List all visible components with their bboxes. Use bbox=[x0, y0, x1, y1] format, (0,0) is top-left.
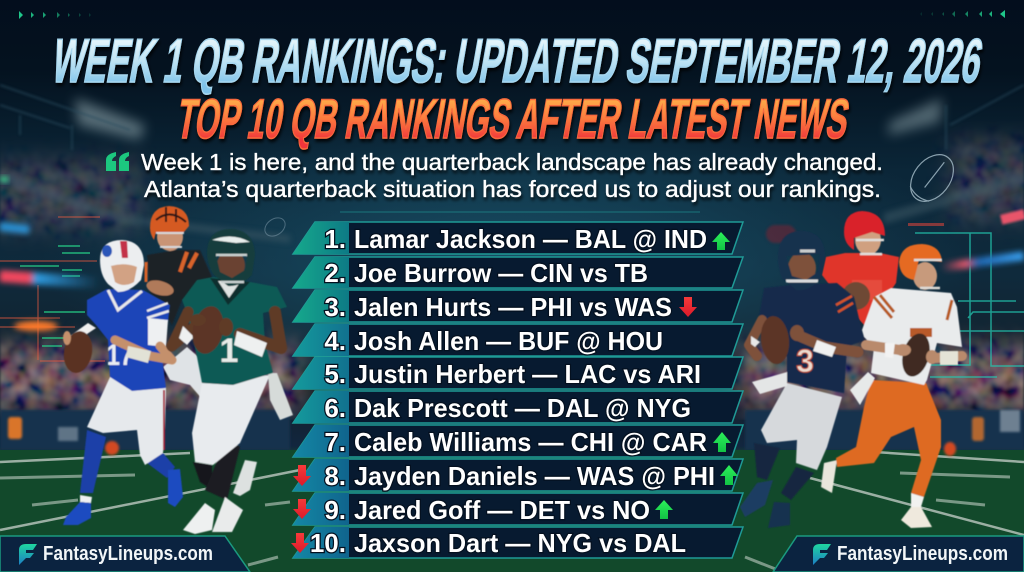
row 4: Josh Allen: Josh Allen — BUF @ HOU bbox=[354, 326, 663, 356]
row 2: Joe Burrow: Joe Burrow — CIN vs TB bbox=[354, 258, 648, 288]
intro text bbox=[141, 149, 883, 202]
row 9: Jared Goff: 9. bbox=[324, 495, 346, 525]
row 1: Lamar Jackson: Lamar Jackson — BAL @ IND bbox=[354, 224, 707, 254]
player: Caleb Williams (Bears): 3 bbox=[796, 343, 814, 379]
row 10: Jaxson Dart: Jaxson Dart — NYG vs DAL bbox=[354, 528, 686, 558]
rankings list bbox=[291, 222, 743, 558]
player: Patrick Mahomes (Chiefs, back right) bbox=[822, 211, 899, 327]
floating football outline right bbox=[902, 146, 962, 210]
row 3: Jalen Hurts: 3. bbox=[324, 292, 346, 322]
row 6: Dak Prescott: Dak Prescott — DAL @ NYG bbox=[354, 393, 691, 423]
decorative arrows: top left bbox=[19, 11, 91, 19]
row 5: Justin Herbert: Justin Herbert — LAC vs ARI bbox=[354, 359, 701, 389]
footer brand right bbox=[773, 536, 1024, 572]
decorative arrows: top right bbox=[920, 10, 1005, 18]
row 10: Jaxson Dart: 10. bbox=[310, 528, 346, 558]
player: Browns quarterback bbox=[821, 244, 962, 528]
floating football outline left bbox=[261, 214, 289, 240]
row 3: Jalen Hurts: Jalen Hurts — PHI vs WAS bbox=[354, 292, 672, 322]
row 1: Lamar Jackson: 1. bbox=[324, 224, 346, 254]
player: Jalen Hurts (Eagles): 1 bbox=[220, 332, 238, 370]
footer brand left: FantasyLineups.com bbox=[43, 542, 213, 565]
footer brand left bbox=[0, 536, 250, 572]
player: Jalen Hurts (Eagles) bbox=[172, 229, 293, 534]
row 8: Jayden Daniels: Jayden Daniels — WAS @ PHI bbox=[354, 461, 715, 491]
row 7: Caleb Williams: Caleb Williams — CHI @ CAR bbox=[354, 427, 707, 457]
row 2: Joe Burrow: 2. bbox=[324, 258, 346, 288]
row 7: Caleb Williams: 7. bbox=[324, 427, 346, 457]
row 8: Jayden Daniels: 8. bbox=[324, 461, 346, 491]
row 4: Josh Allen bbox=[293, 324, 743, 356]
row 9: Jared Goff bbox=[293, 493, 743, 525]
intro text: Week 1 is here, and the quarterback landscape has already changed. bbox=[141, 149, 883, 175]
row 9: Jared Goff: Jared Goff — DET vs NO bbox=[354, 495, 650, 525]
divider glow line bbox=[340, 211, 700, 213]
player: Josh Allen (Bills): 17 bbox=[106, 339, 134, 372]
player: Caleb Williams (Bears) bbox=[740, 231, 864, 528]
row 3: Jalen Hurts bbox=[293, 290, 743, 322]
intro text: Atlanta’s quarterback situation has forced us to adjust our rankings. bbox=[144, 176, 881, 202]
player: Joe Burrow (Bengals, back left) bbox=[145, 206, 257, 496]
row 5: Justin Herbert: 5. bbox=[324, 359, 346, 389]
row 4: Josh Allen: 4. bbox=[324, 326, 346, 356]
HUD graphics right bbox=[766, 209, 1024, 377]
icon: quote mark bbox=[106, 152, 129, 171]
row 2: Joe Burrow bbox=[293, 257, 743, 288]
HUD graphics left bbox=[0, 177, 105, 361]
row 6: Dak Prescott: 6. bbox=[324, 393, 346, 423]
player: Josh Allen (Bills) bbox=[61, 240, 183, 525]
